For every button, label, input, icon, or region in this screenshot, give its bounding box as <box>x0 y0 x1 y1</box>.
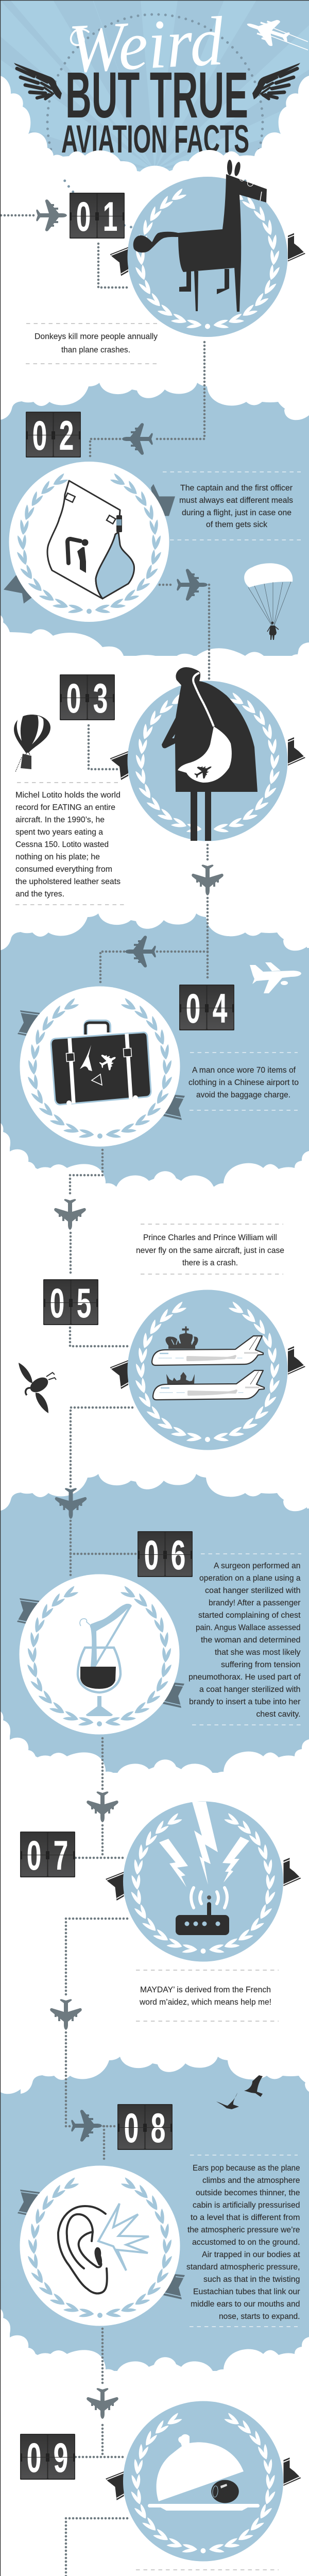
icon: plane one <box>152 1336 263 1365</box>
flip number 07: 0 <box>27 1832 41 1879</box>
text block: fact 5: there is a crash. <box>182 1259 238 1267</box>
icon: crown one <box>166 1327 198 1349</box>
flip number 07 <box>20 1832 75 1879</box>
text block: fact 6: operation on a plane using a <box>199 1574 301 1583</box>
flip number 01 <box>70 193 125 240</box>
text block: fact 6 <box>188 1554 301 1725</box>
icon: birds <box>216 2075 263 2109</box>
dotted flight path <box>1 215 209 2576</box>
icon: radio router <box>176 1888 229 1935</box>
text block: fact 3: and the tyres. <box>15 890 64 899</box>
flip number 06: 6 <box>171 1532 185 1579</box>
text block: fact 6: a coat hanger sterilized with <box>199 1685 301 1694</box>
flip number 06: 0 <box>144 1532 159 1579</box>
text block: fact 7: MAYDAY’ is derived from the French <box>140 1986 271 1994</box>
flip number 09: 9 <box>54 2434 68 2481</box>
ribbon and badge <box>110 681 305 841</box>
flip number 08: 8 <box>151 2105 165 2151</box>
text block: fact 3: the upholstered leather seats <box>15 877 121 886</box>
icon: suitcase <box>51 1022 151 1106</box>
medallion 9: olive under cloche <box>106 2401 301 2562</box>
text block: fact 8: such as that in the twisting <box>203 2275 300 2284</box>
text block: fact 6: chest cavity. <box>256 1710 301 1719</box>
ribbon and badge <box>110 177 305 337</box>
text block: fact 4: avoid the baggage charge. <box>196 1091 290 1099</box>
ribbon and badge <box>18 986 185 1147</box>
icon: ear <box>58 2206 107 2294</box>
text block: fact 8: to a level that is different from <box>191 2213 300 2222</box>
flip number 03: 0 <box>66 675 81 722</box>
text block: fact 5: never fly on the same aircraft, just in case <box>136 1246 284 1255</box>
icon: cloche <box>148 2434 260 2511</box>
flip number 04: 0 <box>186 985 200 1032</box>
text block: fact 4 <box>188 1053 299 1110</box>
text block: fact 8: Ears pop because as the plane <box>193 2164 300 2173</box>
text block: fact 6: brandy to insert a tube into her <box>189 1698 301 1706</box>
text block: fact 5 <box>136 1224 284 1274</box>
text block: fact 4: A man once wore 70 items of <box>192 1066 296 1075</box>
text block: fact 3: consumed everything from <box>15 865 112 874</box>
icon: hot air balloon <box>14 715 50 772</box>
text block: fact 1 <box>26 324 158 364</box>
text block: fact 8: cabin is artificially pressurised <box>193 2201 300 2210</box>
icon: white airliner <box>250 962 301 993</box>
flip number 02: 0 <box>32 412 47 459</box>
flip number 08: 0 <box>124 2105 139 2151</box>
medallion 8: ear <box>18 2166 185 2326</box>
medallion 2: sick bag <box>4 462 175 622</box>
icon: parachutist <box>244 563 293 640</box>
text block: fact 2 <box>163 472 301 540</box>
text block: fact 8 <box>186 2155 300 2327</box>
text block: fact 6: A surgeon performed an <box>214 1562 301 1570</box>
ribbon and badge <box>4 462 175 622</box>
icon: pop burst <box>98 2204 149 2270</box>
ribbon and badge <box>18 2166 185 2326</box>
text block: fact 6: the woman and determined <box>201 1636 301 1645</box>
flip number 05: 5 <box>77 1280 91 1327</box>
text block: fact 5: Prince Charles and Prince William will <box>143 1233 277 1242</box>
ribbon and badge <box>17 1574 184 1734</box>
flip number 01: 0 <box>76 193 91 240</box>
flip number 04: 4 <box>213 985 228 1032</box>
flip number 05 <box>43 1279 98 1327</box>
text block: fact 6: that she was most likely <box>215 1648 301 1657</box>
icon: crown two <box>166 1372 195 1384</box>
text block: fact 3: spent two years eating a <box>15 828 103 837</box>
text block: fact 9 <box>134 2570 279 2576</box>
flip number 03 <box>60 674 115 722</box>
flip number 01: 1 <box>103 193 117 240</box>
flip number 09 <box>20 2434 75 2481</box>
text block: fact 2: during a flight, just in case one <box>182 509 291 517</box>
icon: olive <box>211 2480 239 2503</box>
panel: header sky <box>0 0 309 230</box>
text block: fact 7: word m’aidez, which means help me! <box>139 1998 271 2007</box>
medallion 7: mayday radio <box>106 1801 301 1962</box>
medallion 1: donkey <box>110 160 305 337</box>
text block: fact 6: pneumothorax. He used part of <box>188 1673 301 1682</box>
text block: fact 6: started complaining of chest <box>198 1611 301 1620</box>
text block: fact 2: The captain and the first officer <box>180 484 293 493</box>
text block: fact 3: nothing on his plate; he <box>15 853 100 861</box>
text block: fact 7 <box>136 1970 279 2021</box>
text block: fact 8: the atmospheric pressure we’re <box>187 2226 300 2234</box>
text block: fact 6: suffering from tension <box>221 1660 301 1669</box>
text block: fact 3: Cessna 150. Lotito wasted <box>15 840 109 849</box>
flip number 05: 0 <box>50 1280 64 1327</box>
text block: fact 3: Michel Lotito holds the world <box>15 791 121 800</box>
icon: sick bag <box>47 481 134 599</box>
icon: plane two <box>153 1370 264 1400</box>
icon: glass with hanger <box>78 1604 132 1716</box>
text block: fact 3: record for EATING an entire <box>15 803 115 812</box>
ribbon and badge <box>106 2401 301 2562</box>
flip number 02: 2 <box>59 412 74 459</box>
text block: fact 1: than plane crashes. <box>61 346 130 354</box>
text block: fact 8: nose, starts to expand. <box>219 2312 300 2321</box>
header clouds <box>0 76 309 178</box>
text block: fact 2: must always eat different meals <box>179 496 293 505</box>
icon: lightning bolts <box>159 1802 249 1887</box>
icon: left wing <box>14 63 62 99</box>
icon: right wing <box>252 63 300 99</box>
text block: fact 6: pain. Angus Wallace assessed <box>196 1623 301 1632</box>
text block: fact 8: accustomed to on the ground. <box>192 2238 300 2247</box>
flip number 04 <box>179 985 234 1032</box>
text block: fact 8: middle ears to our mouths and <box>191 2300 300 2309</box>
text block: fact 6: brandy! After a passenger <box>209 1599 301 1607</box>
text block: fact 8: climbs and the atmosphere <box>202 2176 300 2185</box>
text block: fact 8: outside becomes thinner, the <box>196 2189 300 2197</box>
icon: donkey <box>133 160 267 312</box>
icon: flying winged creature <box>19 1363 56 1413</box>
medallion 4: suitcase <box>18 986 185 1147</box>
flip number 06 <box>138 1531 193 1579</box>
text block: fact 6: coat hanger sterilized with <box>205 1586 301 1595</box>
flip number 03: 3 <box>93 675 108 722</box>
text block: fact 2: of them gets sick <box>206 520 268 529</box>
heading: weird: Weird <box>67 3 226 88</box>
medallion 5: royal planes <box>110 1290 305 1450</box>
icon: man silhouette <box>162 667 258 841</box>
medallion 6: brandy and hanger <box>17 1574 184 1734</box>
ribbon and badge <box>110 1290 305 1450</box>
ribbon and badge <box>106 1801 301 1962</box>
flip number 09: 0 <box>27 2434 41 2481</box>
text block: fact 8: Eustachian tubes that link our <box>193 2287 300 2296</box>
text block: fact 1: Donkeys kill more people annually <box>35 332 158 341</box>
flip number 07: 7 <box>54 1832 68 1879</box>
medallion 3: man eating plane <box>110 667 305 841</box>
icon: white plane with contrails <box>243 11 308 50</box>
flip number 08 <box>117 2104 173 2151</box>
icon: plane markers on the flight path <box>36 199 224 2576</box>
text block: fact 4: clothing in a Chinese airport to <box>188 1078 299 1087</box>
flip number 02 <box>26 412 81 459</box>
text block: fact 3 <box>15 783 124 905</box>
text block: fact 3: aircraft. In the 1990’s, he <box>15 816 105 824</box>
text block: fact 8: Air trapped in our bodies at <box>202 2250 300 2259</box>
text block: fact 8: standard atmospheric pressure, <box>186 2263 300 2272</box>
